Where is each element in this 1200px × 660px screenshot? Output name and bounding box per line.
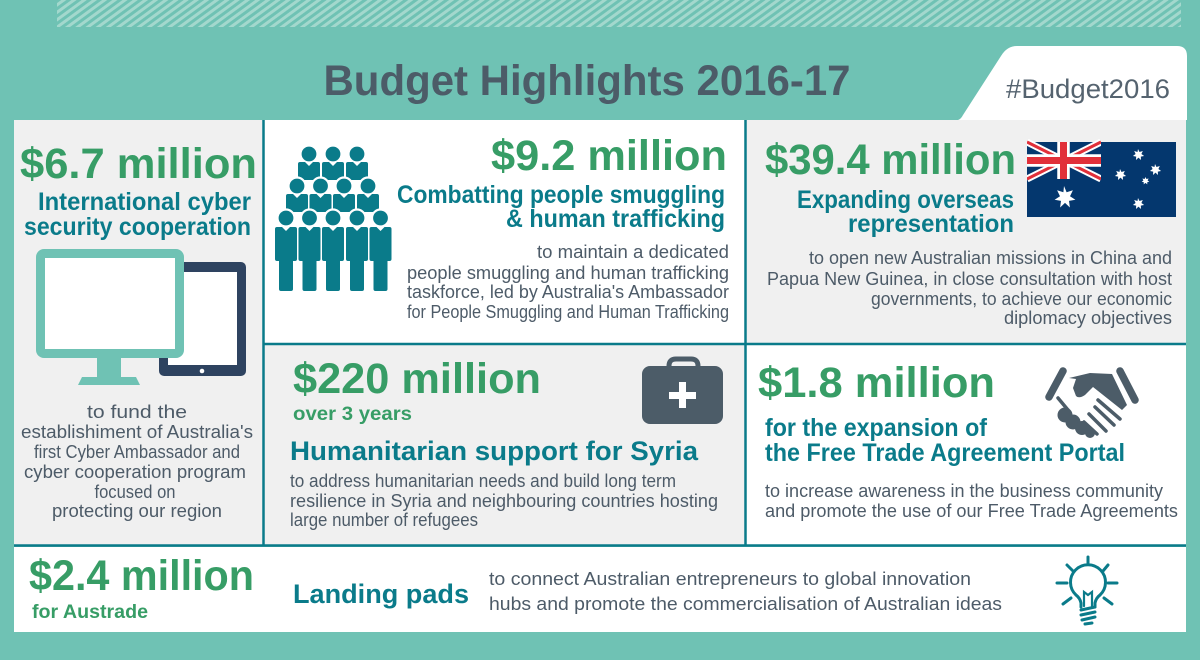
heading: free trade portal	[765, 414, 1125, 467]
heading: people smuggling: & human trafficking	[506, 205, 725, 233]
body text: landing pads: to connect Australian entrepreneurs to global innovation	[489, 569, 971, 589]
amount: 39.4 million: $39.4 million	[765, 136, 1016, 184]
hashtag tab: #Budget2016	[1006, 74, 1170, 104]
body text: cyber security: first Cyber Ambassador and	[34, 442, 240, 462]
panel: humanitarian support	[263, 345, 746, 545]
body text: cyber security	[21, 402, 253, 521]
title: Budget Highlights 2016-17	[324, 57, 850, 105]
heading: overseas representation: representation	[848, 210, 1014, 238]
body text: humanitarian support: to address humanitarian needs and build long term	[290, 471, 676, 491]
body text: cyber security: cyber cooperation program	[24, 462, 246, 482]
body text: people smuggling	[407, 242, 729, 322]
body text: humanitarian support: resilience in Syria and neighbouring countries hosting	[290, 491, 718, 511]
heading: cyber security: International cyber	[38, 188, 251, 216]
body text: cyber security: focused on	[94, 482, 176, 502]
heading: free trade portal: the Free Trade Agreement Portal	[765, 439, 1125, 467]
body text: landing pads	[489, 569, 1002, 614]
icon: light bulb	[1057, 557, 1117, 624]
body text: cyber security: establishiment of Australia's	[21, 422, 253, 442]
sub-label: over 3 years: over 3 years	[293, 404, 412, 425]
body text: overseas representation: diplomacy objectives	[1004, 308, 1172, 328]
heading: free trade portal: for the expansion of	[765, 414, 988, 442]
body text: free trade portal	[765, 481, 1178, 521]
hashtag tab	[958, 46, 1187, 120]
body text: overseas representation: to open new Australian missions in China and	[809, 248, 1172, 268]
body text: cyber security: to fund the	[87, 402, 187, 422]
body text: people smuggling: taskforce, led by Australia's Ambassador	[407, 282, 729, 302]
icon: first aid case	[642, 359, 723, 424]
panel: free trade portal	[746, 345, 1186, 545]
icon: tablet	[159, 262, 246, 376]
body text: humanitarian support: large number of refugees	[290, 510, 478, 530]
hatched top band	[57, 0, 1181, 27]
body text: free trade portal: to increase awareness in the business community	[765, 481, 1163, 501]
heading: cyber security: security cooperation	[24, 213, 251, 241]
body text: people smuggling: people smuggling and human trafficking	[407, 263, 729, 283]
amount: 6.7 million: $6.7 million	[20, 140, 257, 188]
heading: overseas representation: Expanding overseas	[797, 186, 1014, 214]
icon: monitor	[36, 249, 184, 385]
body text: overseas representation: governments, to achieve our economic	[871, 289, 1172, 309]
panel: landing pads	[14, 547, 1186, 632]
body text: people smuggling: to maintain a dedicated	[537, 242, 729, 262]
heading: people smuggling: Combatting people smuggling	[397, 181, 725, 209]
panel: overseas representation	[746, 120, 1186, 345]
heading: overseas representation	[797, 186, 1014, 238]
body text: free trade portal: and promote the use of our Free Trade Agreements	[765, 501, 1178, 521]
body text: landing pads: hubs and promote the commercialisation of Australian ideas	[489, 594, 1002, 614]
body text: overseas representation: Papua New Guinea, in close consultation with host	[767, 269, 1172, 289]
sub-label: for Austrade: for Austrade	[32, 602, 148, 623]
icon: group of people	[275, 144, 392, 291]
heading: Syria: Humanitarian support for Syria	[290, 436, 699, 466]
panel: people smuggling	[263, 120, 746, 345]
body text: humanitarian support	[290, 471, 718, 530]
body text: cyber security: protecting our region	[52, 501, 222, 521]
icon: Australian flag	[1024, 138, 1176, 217]
amount: 1.8 million: $1.8 million	[758, 359, 995, 407]
body text: overseas representation	[767, 248, 1172, 328]
heading: cyber security	[24, 188, 251, 241]
amount: 2.4 million: $2.4 million	[29, 552, 254, 600]
amount: 220 million: $220 million	[293, 355, 541, 403]
heading: people smuggling	[397, 181, 725, 233]
heading: landing pads: Landing pads	[293, 579, 469, 609]
body text: people smuggling: for People Smuggling and Human Trafficking	[407, 302, 729, 322]
amount: 9.2 million: $9.2 million	[491, 132, 727, 180]
icon: handshake	[1049, 371, 1135, 438]
panel: cyber security	[14, 120, 263, 545]
grid lines	[14, 120, 1186, 546]
